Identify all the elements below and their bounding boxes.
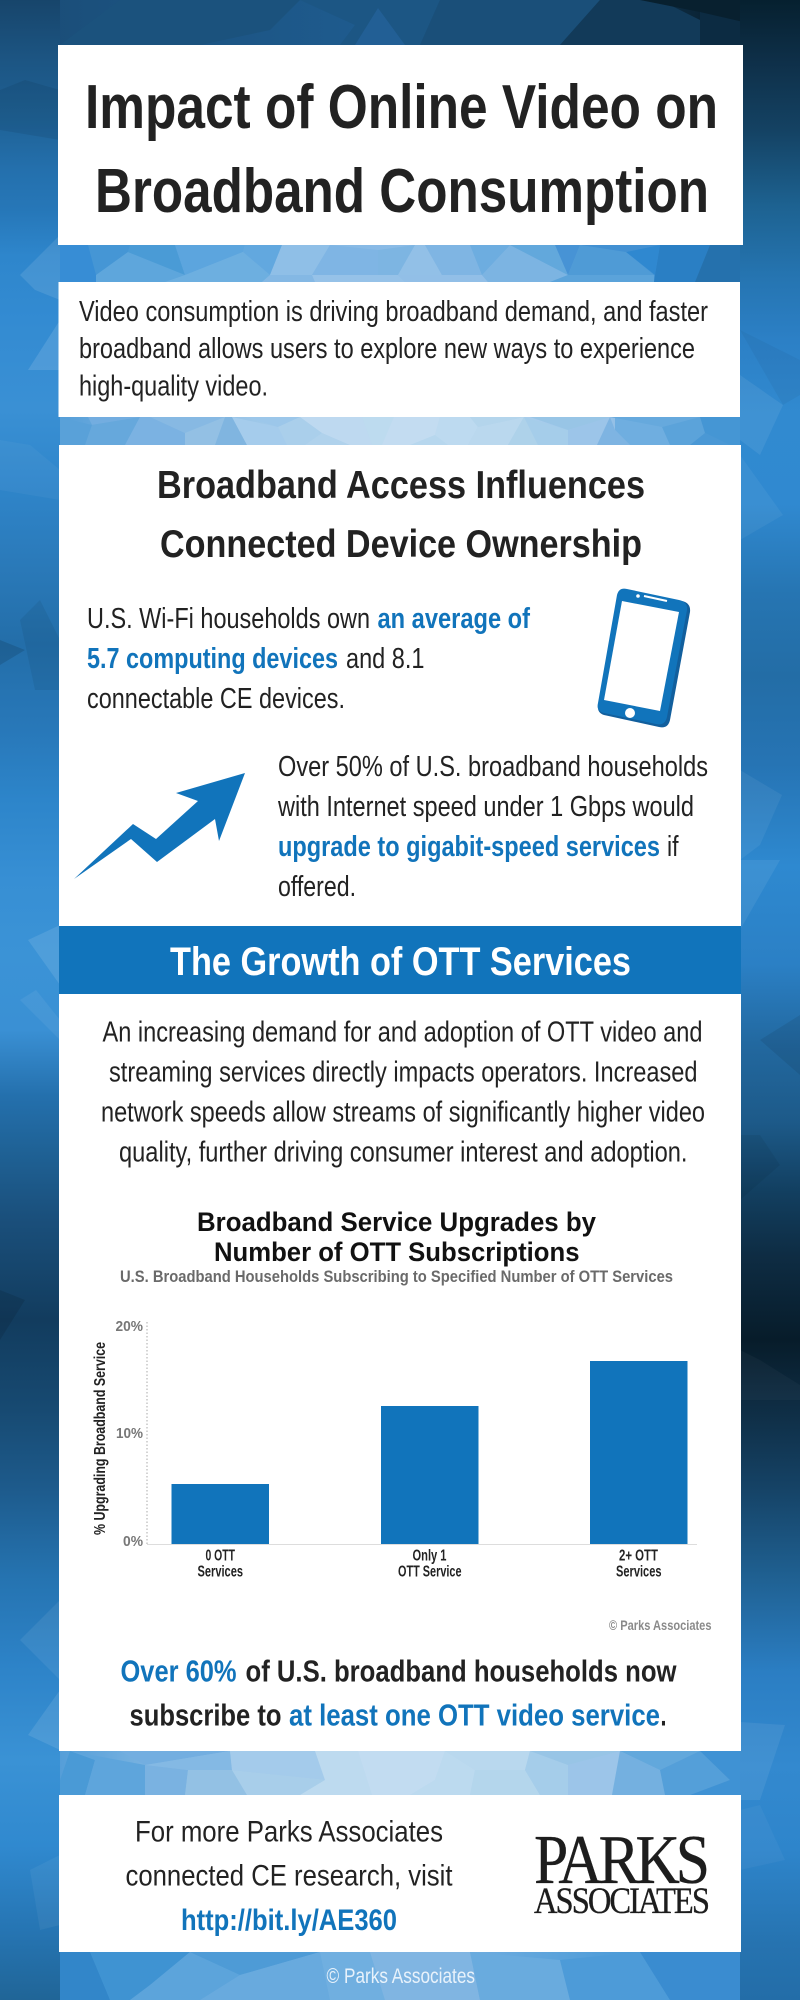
text: computing devices stat — [87, 603, 530, 715]
text: OTT paragraph — [101, 1016, 705, 1168]
heading: connected device ownership — [157, 464, 645, 566]
gap two — [0, 417, 800, 445]
callout: over 60 percent: of U.S. broadband households now — [246, 1654, 677, 1688]
x axis labels: Only 1 — [412, 1548, 447, 1564]
y axis — [92, 1318, 697, 1550]
callout: over 60 percent: Over 60% — [120, 1654, 236, 1688]
chart title: Broadband Service Upgrades by — [197, 1207, 596, 1237]
text: gigabit upgrade stat — [277, 751, 708, 903]
gap one — [0, 245, 800, 282]
text: computing devices stat: an average of — [378, 603, 530, 635]
gap three — [0, 1751, 800, 1795]
callout: over 60 percent: subscribe to — [130, 1698, 282, 1732]
logo: Parks Associates: PARKS — [534, 1821, 710, 1899]
intro text: high-quality video. — [79, 370, 268, 402]
text: computing devices stat: and 8.1 — [346, 643, 424, 675]
x axis labels: Services — [616, 1564, 662, 1580]
footer text — [126, 1816, 453, 1937]
bar chart: broadband service upgrades — [92, 1207, 712, 1633]
icon: rising arrow — [74, 773, 245, 879]
text: computing devices stat: connectable CE devices. — [87, 683, 345, 715]
bottom gap — [0, 1952, 800, 2000]
text: computing devices stat: U.S. Wi-Fi households own — [87, 603, 370, 635]
callout: over 60 percent: . — [660, 1698, 666, 1732]
chart title: Number of OTT Subscriptions — [214, 1237, 580, 1267]
x axis labels: OTT Service — [398, 1564, 462, 1580]
y axis: 0% — [123, 1533, 143, 1550]
panel: main content — [59, 445, 741, 1751]
x axis labels: Services — [198, 1564, 243, 1580]
section banner: growth of OTT services — [59, 926, 741, 994]
bar: 0 OTT services — [172, 1484, 269, 1544]
heading: connected device ownership: Connected Device Ownership — [160, 523, 642, 566]
title — [85, 73, 718, 226]
intro text — [79, 296, 708, 402]
section banner: growth of OTT services: The Growth of OTT Services — [170, 940, 631, 984]
panel: title — [58, 45, 743, 245]
text: OTT paragraph: quality, further driving consumer interest and adoption. — [119, 1136, 688, 1168]
icon: smartphone — [598, 589, 690, 727]
callout: over 60 percent — [120, 1654, 677, 1732]
x axis labels: 2+ OTT — [619, 1548, 658, 1564]
footer text: For more Parks Associates — [135, 1816, 443, 1848]
heading: connected device ownership: Broadband Access Influences — [157, 464, 645, 507]
right edge strip — [740, 0, 800, 2000]
text: gigabit upgrade stat: if — [667, 831, 679, 863]
bar: 2+ OTT services — [590, 1361, 688, 1544]
chart credit: © Parks Associates — [609, 1617, 712, 1633]
y axis: % Upgrading Broadband Service — [92, 1342, 109, 1535]
logo: Parks Associates: ASSOCIATES — [534, 1880, 710, 1921]
bar: only 1 OTT service — [381, 1406, 478, 1544]
text: gigabit upgrade stat: upgrade to gigabit-speed services — [278, 831, 660, 863]
footer text: connected CE research, visit — [126, 1860, 453, 1892]
y axis: 10% — [116, 1425, 143, 1442]
text: computing devices stat: 5.7 computing devices — [87, 643, 338, 675]
panel: footer — [59, 1795, 741, 1952]
chart title — [120, 1207, 673, 1286]
copyright: © Parks Associates — [326, 1965, 475, 1988]
x axis labels — [198, 1548, 662, 1580]
y axis: 20% — [116, 1318, 143, 1335]
left edge strip — [0, 0, 60, 2000]
panel: intro — [58, 282, 740, 417]
text: gigabit upgrade stat: offered. — [278, 871, 356, 903]
text: gigabit upgrade stat: with Internet speed under 1 Gbps would — [277, 791, 694, 823]
footer text: http://bit.ly/AE360 — [181, 1904, 397, 1937]
chart title: U.S. Broadband Households Subscribing to Specified Number of OTT Services — [120, 1268, 673, 1286]
x axis labels: 0 OTT — [206, 1548, 235, 1564]
text: gigabit upgrade stat: Over 50% of U.S. broadband households — [278, 751, 708, 783]
callout: over 60 percent: at least one OTT video service — [289, 1698, 660, 1732]
